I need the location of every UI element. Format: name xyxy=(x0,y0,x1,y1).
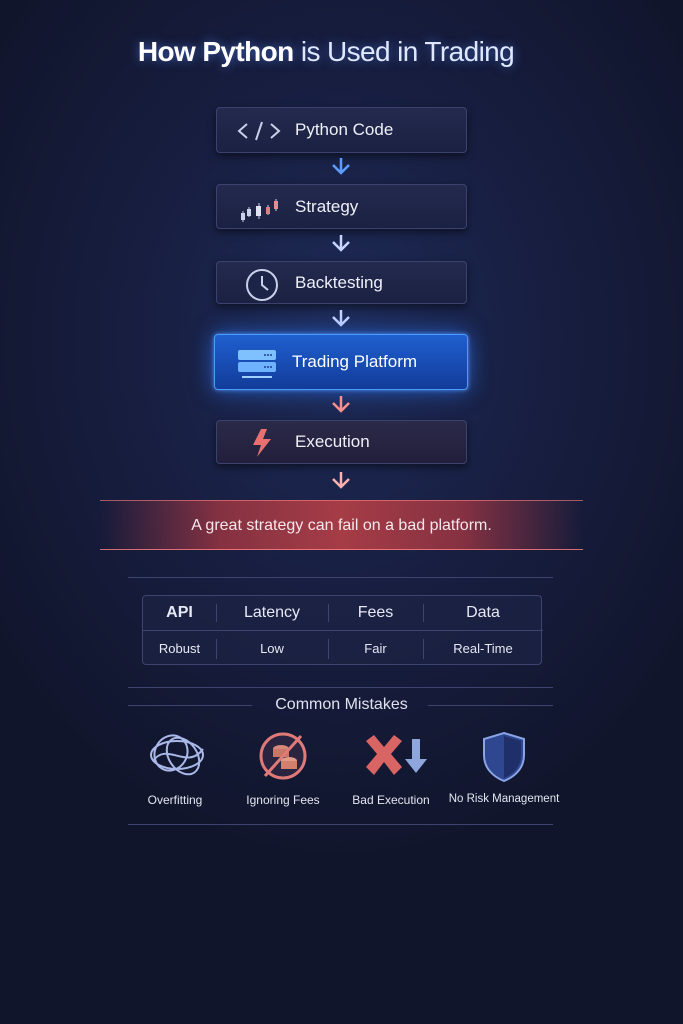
labels: Overfitting xyxy=(148,793,202,807)
table: platform criteria: Real-Time xyxy=(453,641,513,656)
title: How Python is Used in Trading xyxy=(138,36,514,67)
table: platform criteria: Data xyxy=(466,604,500,621)
box: Execution: Execution xyxy=(295,432,370,451)
table: platform criteria: Low xyxy=(260,641,284,656)
arrow 1 xyxy=(332,158,350,175)
icon: overfitting tangle xyxy=(150,734,204,776)
icon: shield xyxy=(483,732,525,782)
callout banner xyxy=(100,500,583,550)
table: platform criteria: Fees xyxy=(358,604,393,621)
box: Execution xyxy=(216,420,467,464)
text: Bad Execution xyxy=(352,793,430,807)
text: Ignoring Fees xyxy=(246,793,320,807)
callout banner: A great strategy can fail on a bad platform. xyxy=(191,517,492,534)
arrow 3 xyxy=(332,310,350,327)
box: Trading Platform (highlighted): Trading Platform xyxy=(292,352,417,371)
arrow 2 xyxy=(332,235,350,252)
box: Strategy: Strategy xyxy=(295,196,358,216)
table: platform criteria: API xyxy=(166,604,193,621)
table: platform criteria: Robust xyxy=(159,641,200,656)
box: Python Code: Python Code xyxy=(295,120,393,139)
box: Strategy xyxy=(216,184,467,229)
arrow 4 xyxy=(332,396,350,413)
box: Python Code xyxy=(216,107,467,153)
box: Backtesting xyxy=(216,261,467,304)
text: No Risk Management xyxy=(449,793,559,805)
heading: Common Mistakes: Common Mistakes xyxy=(275,696,408,713)
icon: bad execution xyxy=(366,735,427,775)
box: Backtesting: Backtesting xyxy=(295,272,383,292)
table: platform criteria: Fair xyxy=(364,641,387,656)
icon: ignoring fees xyxy=(260,732,306,780)
arrow 5 xyxy=(332,472,350,489)
box: Trading Platform (highlighted) xyxy=(214,334,468,390)
table: platform criteria: Latency xyxy=(244,604,300,621)
table: platform criteria xyxy=(142,595,542,665)
